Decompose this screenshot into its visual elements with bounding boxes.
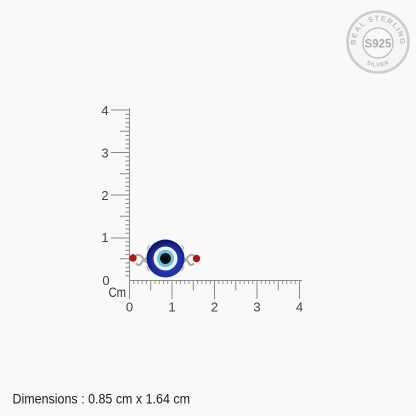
silver seal badge — [346, 10, 410, 74]
horizontal axis labels: 0 — [126, 300, 133, 314]
vertical axis labels — [101, 103, 110, 288]
horizontal axis labels: 1 — [168, 300, 176, 314]
horizontal axis labels: 3 — [253, 300, 261, 314]
horizontal axis labels: 2 — [211, 300, 218, 314]
horizontal axis labels — [126, 300, 303, 314]
vertical axis labels: 1 — [101, 230, 109, 245]
evil eye pendant — [129, 240, 200, 278]
vertical axis labels: 2 — [101, 188, 109, 203]
seal text: REAL STERLING: REAL STERLING — [350, 16, 406, 45]
silver links — [136, 245, 194, 271]
vertical axis labels: 4 — [101, 103, 109, 118]
blue glass eye — [146, 240, 184, 278]
vertical ruler — [111, 108, 130, 280]
horizontal axis labels: 4 — [296, 300, 303, 314]
seal text: S925: S925 — [365, 38, 392, 50]
horizontal ruler — [130, 280, 302, 299]
dimensions caption: Dimensions : 0.85 cm x 1.64 cm — [12, 392, 190, 406]
vertical axis labels: 3 — [101, 146, 109, 160]
vertical axis labels: 0 — [102, 273, 110, 288]
red beads — [129, 254, 137, 262]
seal text: SILVER: SILVER — [366, 60, 389, 67]
unit label: Cm — [108, 285, 126, 300]
